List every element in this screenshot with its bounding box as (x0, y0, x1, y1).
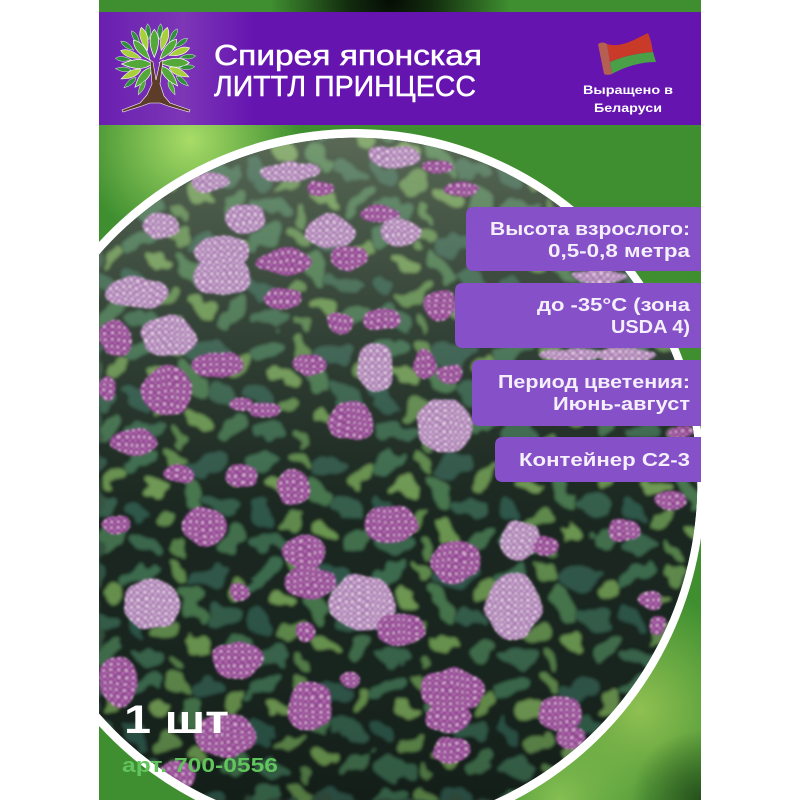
badge: height (466, 207, 701, 271)
white circle ring (99, 129, 701, 800)
origin label: Выращено в (583, 83, 673, 97)
badge: frost resistance (455, 283, 701, 348)
badge: container: Контейнер С2-3 (519, 449, 690, 470)
badge: container (495, 437, 701, 482)
badge: height: 0,5-0,8 метра (548, 240, 691, 261)
title: Спирея японская (214, 40, 482, 72)
header band (99, 12, 701, 125)
title (214, 40, 482, 103)
badge: flowering period (472, 360, 701, 426)
origin label: Беларуси (594, 101, 662, 115)
origin label (583, 83, 673, 115)
quantity label: 1 шт (124, 698, 229, 742)
tree leaves (115, 24, 196, 96)
tree trunk (122, 60, 190, 112)
logo: tree (115, 24, 196, 112)
product card (99, 0, 701, 800)
badge: frost resistance: до -35°С (зона (537, 294, 691, 315)
plant photo: spirea bush (99, 130, 701, 800)
badge: flowering period: Период цветения: (498, 371, 690, 392)
icon: flag of Belarus (598, 33, 656, 75)
badge: height: Высота взрослого: (490, 218, 690, 239)
article number: арт. 700-0556 (122, 755, 278, 777)
badge: frost resistance: USDA 4) (611, 316, 690, 337)
badge: flowering period: Июнь-август (553, 393, 690, 414)
title: ЛИТТЛ ПРИНЦЕСС (214, 71, 476, 103)
blurred green background (99, 0, 701, 800)
